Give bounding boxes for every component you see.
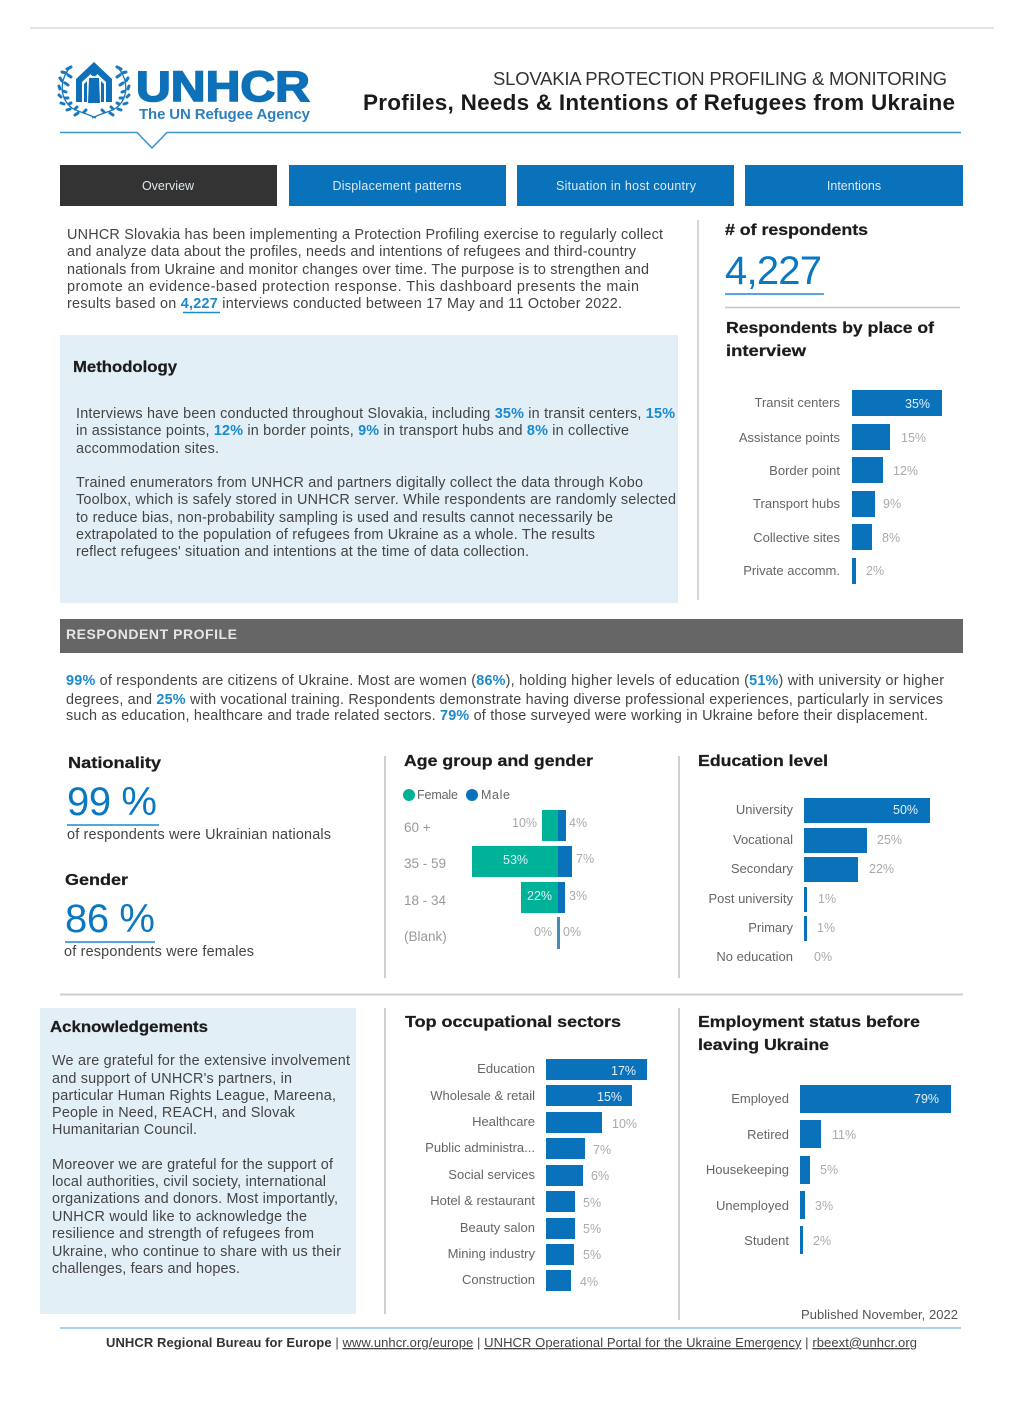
logo wordmark: UNHCR [136,63,310,111]
respondent profile text: degrees, and 25% with vocational training. Respondents demonstrate having diverse professional experiences, particularly in services [66,692,943,708]
chart: top occupational sectors [405,1014,647,1291]
chart: top occupational sectors: 7% [593,1143,611,1157]
chart: education level: No education [716,949,793,964]
methodology text: Toolbox, which is safely stored in UNHCR server. While respondents are randomly selected [76,492,676,508]
acknowledgements text: local authorities, civil society, international [52,1174,326,1190]
chart: age group and gender: (Blank) [404,929,447,944]
acknowledgements text: challenges, fears and hopes. [52,1261,240,1277]
kpi: number of respondents: # of respondents [725,222,868,239]
bar chart: place of interview: 8% [882,531,900,545]
chart: education level: Secondary [731,861,793,876]
acknowledgements heading: Acknowledgements [50,1019,208,1036]
heading: respondents by place of interview: interview [726,343,807,360]
chart: employment status [698,1014,951,1254]
methodology text [76,406,676,560]
intro text [67,227,663,312]
tab: Situation in host country: Situation in host country [556,179,697,193]
kpi: nationality: 99 % [67,780,157,824]
chart: age group and gender: 4% [569,816,587,830]
chart heading: Education level [698,753,828,770]
chart: age group and gender: 0% [563,925,581,939]
bar chart: place of interview: 12% [893,464,918,478]
acknowledgements text: UNHCR would like to acknowledge the [52,1209,307,1225]
chart: age group and gender: 3% [569,889,587,903]
navigation tabs [60,165,963,206]
chart: top occupational sectors: Hotel & restaurant [430,1193,535,1208]
chart: age group and gender: 60 + [404,820,431,835]
chart: top occupational sectors: Wholesale & retail [430,1088,535,1103]
kpi: nationality [67,755,331,843]
legend: Female [417,788,458,802]
methodology text: reflect refugees' situation and intentions at the time of data collection. [76,544,529,560]
chart: top occupational sectors: 6% [591,1169,609,1183]
acknowledgements text: particular Human Rights League, Mareena, [52,1088,336,1104]
chart: age group and gender: 10% [512,816,537,830]
chart: top occupational sectors: Public administra... [425,1140,535,1155]
footer: UNHCR Regional Bureau for Europe | www.unhcr.org/europe | UNHCR Operational Portal for the Ukraine Emergency | rbeext@unhcr.org [106,1335,917,1350]
tab: Intentions: Intentions [827,179,881,193]
chart: top occupational sectors: 4% [580,1275,598,1289]
chart: education level [698,753,930,964]
panel: methodology [60,335,678,603]
kpi: number of respondents [725,222,868,294]
bar chart: place of interview: 2% [866,564,884,578]
chart: employment status: 5% [820,1163,838,1177]
bar chart: place of interview: Transit centers [754,395,840,410]
respondent profile text: 99% of respondents are citizens of Ukraine. Most are women (86%), holding higher levels of education (51%) with university or higher [66,673,944,689]
heading: respondents by place of interview: Respondents by place of [726,320,935,337]
acknowledgements text: People in Need, REACH, and Slovak [52,1105,296,1121]
intro text: UNHCR Slovakia has been implementing a Protection Profiling exercise to regularly collect [67,227,663,243]
title block [363,68,955,115]
intro text: nationals from Ukraine and monitor changes over time. The purpose is to strengthen and [67,262,649,278]
legend: Male [481,788,510,802]
tab: Displacement patterns [289,165,506,206]
chart heading: Age group and gender [404,753,593,770]
chart: age group and gender [403,753,594,949]
methodology text: extrapolated to the population of refugees from Ukraine as a whole. The results [76,527,595,543]
bar chart: place of interview: 15% [901,431,926,445]
bar chart: place of interview: 35% [905,397,930,411]
heading: respondents by place of interview [726,320,935,360]
chart: age group and gender: 22% [527,889,552,903]
acknowledgements text: and support of UNHCR's partners, in [52,1071,292,1087]
chart: education level: 1% [818,892,836,906]
chart: age group and gender: 18 - 34 [404,893,447,908]
acknowledgements text: Moreover we are grateful for the support of [52,1157,334,1173]
kpi: gender [64,872,254,960]
publication date: Published November, 2022 [801,1307,958,1322]
methodology text: to reduce bias, non-probability sampling is used and results cannot necessarily be [76,510,613,526]
acknowledgements text [52,1053,350,1277]
chart: top occupational sectors: 10% [612,1117,637,1131]
chart: education level: 0% [814,950,832,964]
methodology text: accommodation sites. [76,441,219,457]
chart: top occupational sectors: Healthcare [472,1114,535,1129]
intro text: results based on 4,227 interviews conducted between 17 May and 11 October 2022. [67,296,622,312]
chart: education level: Vocational [733,832,793,847]
respondent profile text: such as education, healthcare and trade related sectors. 79% of those surveyed were working in Ukraine before their displacement. [66,708,928,724]
chart: top occupational sectors: Education [477,1061,535,1076]
tab: Situation in host country [517,165,734,206]
chart: age group and gender: 7% [576,852,594,866]
section banner: respondent profile: RESPONDENT PROFILE [66,626,237,642]
chart: age group and gender: 35 - 59 [404,856,446,871]
chart: top occupational sectors: Construction [462,1272,535,1287]
methodology text: Interviews have been conducted throughout Slovakia, including 35% in transit centers, 15% [76,406,675,422]
chart: employment status: Student [744,1233,789,1248]
chart: employment status: leaving Ukraine [698,1037,829,1054]
icon: laurel and sheltering hands [59,62,129,118]
chart: age group and gender: 0% [534,925,552,939]
acknowledgements text: Ukraine, who continue to share with us their [52,1244,341,1260]
chart: employment status: 3% [815,1199,833,1213]
bar chart: place of interview: Transport hubs [753,496,840,511]
kpi: nationality: Nationality [68,755,161,772]
title block: SLOVAKIA PROTECTION PROFILING & MONITORING [493,68,947,89]
tab: Overview: Overview [142,179,195,193]
kpi: gender: Gender [65,872,128,889]
chart: top occupational sectors: Beauty salon [460,1220,535,1235]
section banner: respondent profile [60,619,963,653]
header rule with notch [60,132,961,148]
bar chart: place of interview: Collective sites [753,530,840,545]
respondent profile text [66,673,944,724]
acknowledgements text: resilience and strength of refugees from [52,1226,314,1242]
bar chart: place of interview: Border point [769,463,840,478]
chart: top occupational sectors: Mining industry [448,1246,535,1261]
panel: acknowledgements [40,1008,356,1314]
chart: education level: 50% [893,803,918,817]
chart heading: Top occupational sectors [405,1014,621,1031]
kpi: gender: of respondents were females [64,944,254,960]
chart: top occupational sectors: 5% [583,1196,601,1210]
intro text: promote an evidence-based protection response. This dashboard presents the main [67,279,639,295]
chart: employment status: 79% [914,1092,939,1106]
chart: employment status: Unemployed [716,1198,789,1213]
chart: age group and gender: 53% [503,853,528,867]
intro text: and analyze data about the profiles, needs and intentions of refugees and third-country [67,244,637,260]
methodology text: in assistance points, 12% in border points, 9% in transport hubs and 8% in collective [76,423,629,439]
chart: top occupational sectors: 17% [611,1064,636,1078]
bar chart: place of interview [739,390,942,584]
chart: top occupational sectors: 5% [583,1248,601,1262]
header: UNHCR logo [59,62,311,123]
chart heading: Employment status before [698,1014,920,1031]
chart: education level: Primary [748,920,793,935]
acknowledgements text: We are grateful for the extensive involvement [52,1053,350,1069]
chart: education level: University [736,802,793,817]
bar chart: place of interview: Assistance points [739,430,840,445]
acknowledgements text: Humanitarian Council. [52,1122,197,1138]
chart: employment status: 2% [813,1234,831,1248]
chart: top occupational sectors: Social services [448,1167,535,1182]
chart: employment status: Retired [747,1127,789,1142]
logo tagline: The UN Refugee Agency [139,106,311,123]
chart: education level: 1% [817,921,835,935]
chart: education level: 25% [877,833,902,847]
chart: top occupational sectors: 15% [597,1090,622,1104]
chart: education level: 22% [869,862,894,876]
chart: education level: Post university [708,891,793,906]
kpi: gender: 86 % [65,897,155,941]
tab: Intentions [745,165,963,206]
title block: Profiles, Needs & Intentions of Refugees from Ukraine [363,90,955,115]
kpi: number of respondents: 4,227 [725,249,822,293]
kpi: nationality: of respondents were Ukrainian nationals [67,827,331,843]
bar chart: place of interview: Private accomm. [743,563,840,578]
chart: top occupational sectors: 5% [583,1222,601,1236]
tab: Overview [60,165,277,206]
chart: employment status: Housekeeping [706,1162,789,1177]
methodology text: Trained enumerators from UNHCR and partners digitally collect the data through Kobo [76,475,643,491]
tab: Displacement patterns: Displacement patterns [332,179,462,193]
bar chart: place of interview: 9% [883,497,901,511]
methodology heading: Methodology [73,359,177,376]
legend [403,788,510,802]
chart: employment status: Employed [731,1091,789,1106]
chart: employment status: 11% [832,1128,856,1142]
acknowledgements text: organizations and donors. Most importantly, [52,1191,338,1207]
